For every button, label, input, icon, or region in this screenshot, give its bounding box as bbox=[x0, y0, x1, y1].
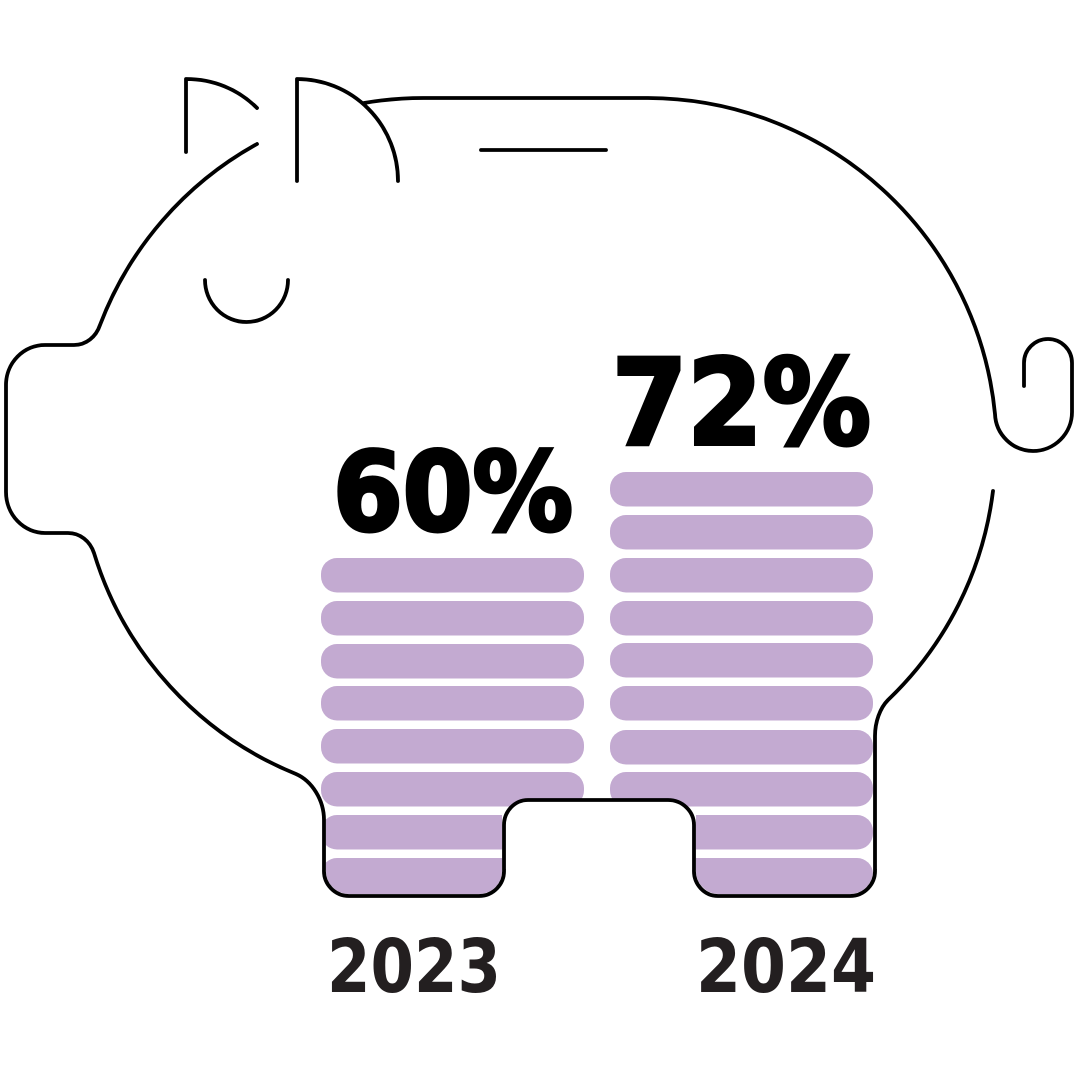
far ear bbox=[186, 79, 257, 152]
label: 2023: 2023 bbox=[327, 924, 501, 1010]
coin slot bbox=[481, 148, 606, 152]
value: 72%: 72% bbox=[612, 335, 871, 473]
closed eye bbox=[205, 280, 288, 322]
near ear bbox=[297, 79, 398, 181]
gap between pig legs bbox=[504, 800, 694, 896]
label: 2024: 2024 bbox=[696, 924, 876, 1010]
pig belly, legs and snout bbox=[6, 144, 993, 896]
bar stack: 2023 bbox=[321, 558, 584, 896]
piggy bank outline bbox=[6, 79, 1072, 896]
bar stack: 2024 bbox=[610, 472, 873, 896]
pig back and tail bbox=[364, 98, 1072, 451]
value: 60%: 60% bbox=[333, 429, 573, 556]
